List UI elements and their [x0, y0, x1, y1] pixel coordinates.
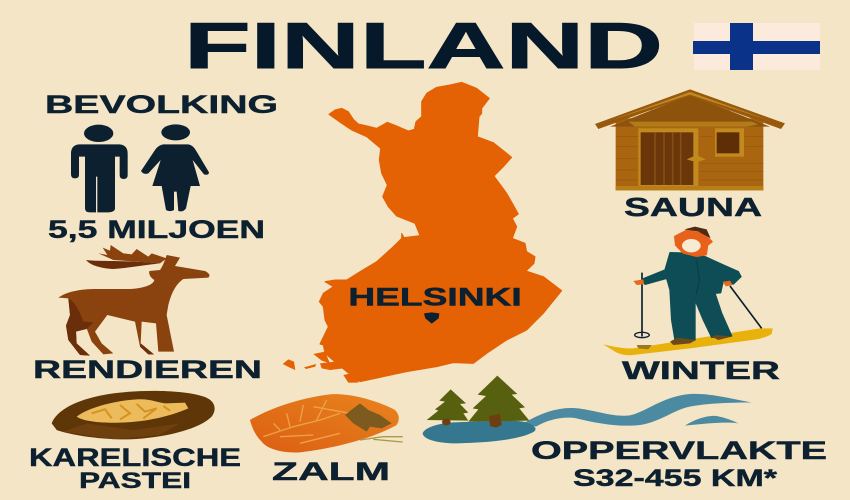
boots [670, 335, 732, 345]
islands [283, 352, 358, 383]
panel: Karelian pasty [29, 391, 241, 493]
label: Helsinki: HELSINKI [348, 284, 522, 312]
icon: reindeer [58, 245, 209, 356]
label: Winter: WINTER [622, 357, 780, 385]
panel: population [45, 91, 278, 244]
panel: area [423, 376, 827, 492]
icon: man and woman [71, 124, 209, 212]
hands [633, 279, 733, 286]
stat: 5,5 miljoen: 5,5 MILJOEN [48, 216, 265, 244]
stat: area value: S32-455 KM* [573, 465, 778, 492]
icon: trees and lake [423, 376, 752, 443]
ski poles [642, 273, 762, 337]
heading: Bevolking: BEVOLKING [45, 91, 278, 119]
label: Oppervlakte: OPPERVLAKTE [531, 437, 827, 465]
marker: Helsinki [424, 312, 439, 324]
head [675, 231, 712, 256]
label: Zalm: ZALM [272, 458, 390, 486]
label: Karelische pastei: KARELISCHE [29, 444, 241, 472]
panel: salmon [250, 394, 403, 486]
label: Karelische pastei [29, 444, 241, 493]
panel: winter [603, 227, 780, 385]
icon: sauna cabin [595, 89, 785, 190]
label: Sauna: SAUNA [624, 192, 762, 222]
panel: sauna [595, 89, 785, 222]
body [643, 253, 741, 340]
label: Rendieren: RENDIEREN [33, 356, 262, 384]
map of Finland [283, 82, 562, 383]
icon: salmon fillet [250, 394, 403, 452]
icon: Finnish flag [693, 23, 820, 70]
label: Karelische pastei: PASTEI [79, 468, 191, 493]
icon: Karelian pasty [52, 391, 215, 439]
title: FINLAND [184, 9, 663, 82]
icon: skier [603, 227, 773, 355]
ski [603, 328, 773, 355]
panel: reindeer [33, 245, 262, 384]
